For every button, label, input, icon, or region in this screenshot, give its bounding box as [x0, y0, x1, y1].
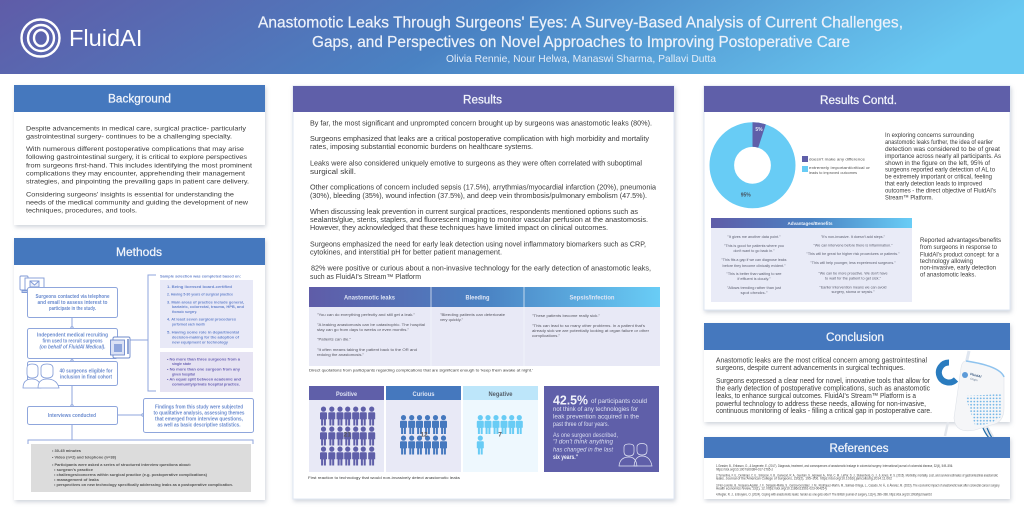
results text: When discussing leak prevention in current surgical practices, respondents mentioned options such as [310, 209, 639, 216]
interview details: • 30-45 minutes [52, 449, 81, 453]
results text: sealants/glue, stents, staplers, and fluorescent imaging to monitor vascular perfusion at the anastomosis. [310, 217, 648, 224]
interview details: • perspectives on new technology specifically addressing leaks as a postoperative complication. [54, 483, 233, 487]
device image: Stream platform [939, 351, 1004, 438]
heading: conclusion [704, 323, 1010, 350]
device image: Stream platform: FluidAI [970, 372, 982, 379]
flow box: recruiting: Independent medical recruiting [37, 332, 108, 338]
title: Gaps, and Perspectives on Novel Approaches to Improving Postoperative Care [312, 34, 850, 51]
heading: methods: Methods [116, 245, 162, 259]
flow box: contact: participate in the study. [49, 306, 96, 312]
reference list [716, 464, 1000, 496]
findings box: Findings from this study were subjected [155, 404, 243, 410]
quotes: sepsis: already sick we are potentially looking at organ failure or other [532, 329, 650, 333]
inclusion criteria list: new equipment or technology [172, 340, 229, 344]
interview details: • challenges/concerns within surgical practice (e.g. postoperative complications) [54, 473, 208, 477]
background text: complications they may encounter, apprehending their management [26, 170, 245, 177]
benefits column 2: surgery, stoma or sepsis." [832, 290, 875, 294]
quotes: anastomotic leaks: stay can go from days to weeks or even months." [317, 328, 410, 332]
reference list: https://doi.org/10.1007/s00384-017-2765-z [716, 467, 773, 471]
cohort limits list: • No more than one surgeon from any [167, 367, 241, 371]
heading: results: Results [463, 94, 502, 106]
advantages text [920, 237, 1001, 279]
callout: 42.5%: 42.5% [553, 392, 588, 408]
table headers [344, 294, 615, 301]
benefits column 1: if effluent is cloudy." [738, 277, 771, 281]
icon: surgeons outline [619, 444, 652, 466]
title: Anastomotic Leaks Through Surgeons' Eyes: A Survey-Based Analysis of Current Challenges, [258, 14, 903, 32]
results text: rates, imposing substantial economic burdens on healthcare systems. [310, 144, 533, 151]
quotes table [309, 287, 660, 366]
benefits column 2: "Earlier intervention means we can avoid [820, 286, 887, 290]
chart legend [802, 156, 871, 175]
inclusion criteria list: bariatric, colorectal, trauma, HPB, and [172, 305, 245, 309]
heading: references [704, 437, 1010, 458]
reference list: 1.Gessler, B., Eriksson, O., & Angenete, E. (2017). Diagnosis, treatment, and consequences of anastomotic leakage in colorectal surgery. International journal of colorectal disease, 32(4), 549–556. [716, 464, 953, 468]
pictogram: negative 7 [463, 386, 538, 472]
findings box: that emerged from interview questions, [155, 416, 243, 422]
conclusion text: the early detection of postoperative complications, such as anastomotic [716, 384, 930, 392]
heading: conclusion: Conclusion [826, 332, 884, 344]
flow box: contact: and email to assess interest to [38, 300, 108, 306]
table headers: Bleeding [466, 294, 490, 301]
donut chart: 95% [741, 192, 751, 198]
conclusion text: powerful technology to address these needs, allowing for non-invasive, [716, 399, 926, 408]
callout: 42.5%: "I don't think anything [553, 439, 614, 446]
cohort limits list: single state [172, 362, 191, 366]
heading: results contd: Results Contd. [820, 95, 897, 107]
results text [310, 120, 656, 281]
results text: Surgeons emphasized that leaks are a critical postoperative complication with high morbidity and mortality [310, 136, 650, 143]
heading: background: Background [108, 94, 171, 106]
pictogram: negative 7: 7 [498, 432, 502, 438]
results contd text: detection was considered to be of great [885, 146, 1000, 153]
quotes: anastomotic leaks: "A leaking anastomosis can be catastrophic. The hospital [317, 323, 425, 327]
conclusion text: surgeons, despite current advancements in surgical techniques. [716, 363, 905, 372]
results text: However, they acknowledged that these techniques have limited impact on clinical outcomes. [310, 225, 608, 232]
flow connectors [28, 275, 253, 444]
reference list: Health economics review, 13(1), 12. https://doi.org/10.1186/s13561-023-00425-y [716, 486, 827, 490]
title [258, 14, 903, 51]
callout: 42.5%: not think of any technologies for [553, 406, 639, 413]
table headers: Sepsis/Infection [570, 294, 615, 301]
benefits column 2: "This will help younger, less experienced surgeons." [810, 261, 896, 265]
authors: Olivia Rennie, Nour Helwa, Manaswi Sharma, Pallavi Dutta [446, 53, 716, 65]
results contd text: that early detection leads to improved [885, 180, 982, 187]
inclusion criteria list: decision-making for the adoption of [172, 335, 240, 339]
results text: Surgeons emphasized the need for early leak detection using novel inflammatory biomarkers such as CRP, [310, 242, 646, 248]
results text: 82% were positive or curious about a non-invasive technology for the early detection of anastomotic leaks, [311, 266, 651, 272]
interview details: • Video (n=2) and telephone (n=38) [52, 456, 117, 460]
device image: Stream platform: Origin [970, 377, 978, 382]
background text: Considering surgeons' insights is essential for understanding the [26, 191, 234, 198]
icon: clipboard [110, 337, 130, 358]
quotes: bleeding: very quickly." [440, 318, 464, 322]
logo: FluidAI: FluidAI [69, 25, 142, 51]
results contd text: shown in the figure on the left, 95% of [885, 160, 990, 167]
benefits column 2: "This will be great for higher risk procedures or patients." [806, 252, 900, 256]
cohort limits list: community/private hospital practice. [172, 383, 240, 387]
advantages text: of anastomotic leaks. [920, 272, 976, 279]
pictogram: curious 12 [386, 386, 461, 472]
advantages text: technology allowing [920, 258, 973, 265]
pictogram: positive 21: 21 [344, 432, 351, 438]
inclusion criteria list: 4. At least seven surgical procedures [167, 318, 236, 322]
quotes: sepsis: "This can lead to so many other problems. In a patient that's [532, 324, 645, 328]
inclusion criteria list: thoracic surgery. [172, 310, 197, 314]
conclusion text [716, 356, 932, 415]
benefits column 2 [806, 235, 900, 294]
inclusion criteria list: 1. Being licensed board-certified [167, 285, 233, 289]
advantages text: Reported advantages/benefits [920, 237, 1001, 244]
quotes: anastomotic leaks: "Patients can die." [317, 338, 352, 342]
pictogram: positive 21: Positive [336, 391, 357, 398]
conclusion text: leaks, to enhance surgical outcomes. FluidAI's Stream™ Platform is a [716, 391, 916, 400]
flow box: recruiting: (on behalf of FluidAI Medical). [40, 344, 106, 350]
benefits column 1: "It gives me another data point." [728, 235, 781, 239]
pictogram: curious 12: Curious [412, 391, 435, 398]
advantages table: Advantages/Benefits [788, 221, 833, 226]
advantages table [711, 218, 912, 302]
benefits column 2: "We can intervene before there is inflammation." [814, 244, 893, 248]
flow box: surgeons eligible: 40 surgeons eligible for [60, 368, 113, 374]
results text: By far, the most significant and unprompted concern brought up by surgeons was anastomotic leaks (80%). [310, 120, 652, 128]
findings box: as well as basic descriptive statistics. [158, 422, 241, 428]
cohort limits list: • An equal split between academic and [167, 378, 242, 382]
icon: laptop and phone [20, 276, 47, 292]
conclusion text: Surgeons expressed a clear need for novel, innovative tools that allow for [716, 376, 931, 385]
results contd text: surgeons reported early detection of AL to [885, 167, 995, 174]
benefits column 1 [722, 235, 787, 295]
findings box [144, 398, 254, 432]
flow box: contact [28, 288, 118, 318]
table headers: Anastomotic leaks [344, 294, 396, 301]
heading: results contd [704, 86, 1010, 112]
benefits column 2: "It's non-invasive. It doesn't add steps." [821, 235, 886, 239]
quotes: sepsis: complications." [532, 334, 561, 338]
results text: Leaks were also considered uniquely emotive to surgeons as they were often correlated with suboptimal [310, 160, 642, 168]
icon: two surgeons [23, 364, 59, 388]
interview details [31, 444, 251, 492]
quotes: anastomotic leaks: redoing the anastomosis." [317, 353, 365, 357]
donut chart: 5% [755, 127, 763, 133]
callout: 42.5%: As one surgeon described, [553, 432, 618, 439]
flow box: recruiting: firm used to recruit surgeons [42, 338, 102, 344]
cohort limits list: given hospital [172, 373, 195, 377]
benefits column 2: "We can be more proactive. We don't have [818, 272, 888, 276]
conclusion text: continuous monitoring of leaks - filling a critical gap in postoperative care. [716, 406, 932, 415]
callout: 42.5%: has changed in the last [553, 447, 613, 454]
panel: results [293, 86, 674, 499]
interview details: • management of leaks [54, 478, 99, 482]
sample selection heading: Sample selection was completed based on: [160, 274, 241, 278]
flow box: interviews [28, 406, 118, 424]
results contd text: be extremely important or critical, feeling [885, 173, 992, 180]
background text: from surgeons first-hand. This includes identifying the most prominent [26, 162, 252, 169]
inclusion criteria list: 3. Main areas of practice include general, [167, 300, 244, 304]
interview details: • surgeon's practice [54, 468, 93, 472]
heading: results [293, 86, 674, 112]
benefits column 2: to wait for the patient to get sick." [825, 276, 882, 280]
chart legend: extremely important/critical or [809, 165, 871, 170]
callout: 42.5%: past three of four years. [553, 421, 609, 428]
quotes: sepsis [532, 314, 650, 338]
benefits column 1: "This is better than waiting to see [726, 272, 782, 276]
quotes: anastomotic leaks [317, 313, 425, 357]
results text: cytokines, and interstitial pH for better patient management. [310, 250, 502, 256]
callout: 42.5%: six years." [553, 454, 578, 461]
donut chart [722, 122, 783, 198]
results contd text: importance across nearly all participants. As [885, 153, 1001, 160]
results text: surgical skill. [310, 169, 356, 176]
inclusion criteria list [160, 280, 253, 348]
reference list: 4.Regler, R. J., & Bruyère, O. (2024). Coping with anastomotic leaks: harder as one gets older? The British journal of surgery, 111(4), 396–398. https://doi.org/10.1093/bjs/znae010 [716, 492, 932, 496]
heading: references: References [830, 443, 889, 455]
logo: FluidAI [22, 20, 142, 56]
background text [26, 125, 252, 214]
results text: (30%), bleeding (35%), wound infection (37.5%), and deep vein thrombosis/pulmonary embolism (47.5%). [310, 193, 647, 200]
inclusion criteria list: 5. Having some role in departmental [167, 330, 239, 334]
inclusion criteria list: 2. Having 5-30 years of surgical practice [167, 293, 233, 297]
quotes: sepsis: "These patients become really sick." [532, 314, 601, 318]
panel: results contd [704, 86, 1010, 310]
benefits column 1: before they become clinically evident." [722, 264, 786, 268]
pictogram: positive 21 [309, 386, 384, 472]
results contd text [885, 132, 1001, 201]
background text: following gastrointestinal surgery, it is critical to explore perspectives [26, 154, 248, 161]
heading: background [14, 85, 265, 112]
chart legend: doesn't make any difference [809, 156, 866, 162]
benefits column 1: "Allows trending rather than just [727, 286, 781, 290]
background text: strategies, and pinpointing the prevailing gaps in patient care delivery. [26, 179, 249, 186]
quotes: bleeding [440, 313, 505, 322]
flow box: recruiting [28, 328, 118, 358]
background text: needs of the medical community and guiding the development of new [26, 199, 248, 206]
results text: such as FluidAI's Stream™ Platform [310, 274, 421, 281]
results contd text: Stream™ Platform. [885, 194, 933, 201]
background text: gastrointestinal surgery- continues to be a challenging specialty. [26, 133, 232, 140]
header banner [0, 0, 1024, 74]
benefits column 1: don't want to go back in." [734, 249, 775, 253]
panel: conclusion [704, 323, 1010, 422]
heading: methods [14, 238, 265, 265]
inclusion criteria list: performed each month [172, 323, 206, 327]
benefits column 1: "This fits a gap if we can diagnose leaks [722, 258, 787, 262]
flow box: contact: Surgeons contacted via telephone [36, 294, 110, 300]
benefits column 1: "This is good for patients where you [724, 244, 784, 248]
background text: Despite advancements in medical care, surgical practice- particularly [26, 125, 247, 132]
quotes: anastomotic leaks: "You can do everything perfectly and still get a leak." [317, 313, 416, 317]
results contd text: anastomotic leaks further, the idea of earlier [885, 139, 994, 146]
results contd text: outcomes - the direct objective of FluidAI's [885, 187, 996, 194]
cohort limits list: • No more than three surgeons from a [167, 357, 241, 361]
panel: references [704, 437, 1010, 499]
interview details: • Participants were asked a series of structured interview questions about: [52, 463, 191, 467]
pictogram caption: First reaction to technology that would non-invasively detect anastomotic leaks [308, 476, 460, 480]
results text: Other complications of concern included sepsis (17.5%), arrythmias/myocardial infarction (20%), pneumonia [310, 184, 656, 192]
quotes: bleeding: "Bleeding patients can deteriorate [440, 313, 505, 317]
results contd text: In exploring concerns surrounding [885, 132, 974, 139]
benefits column 1: spot checks." [740, 291, 769, 295]
chart legend: leads to improved outcomes [809, 170, 857, 175]
pictogram: negative 7: Negative [488, 391, 513, 398]
table caption: Direct quotations from participants regarding complications that are significant enough to 'keep them awake at night.' [309, 368, 533, 372]
conclusion text: Anastomotic leaks are the most critical concern among gastrointestinal [716, 356, 927, 364]
flow box: surgeons eligible [28, 362, 118, 386]
quotes: anastomotic leaks: "It often means taking the patient back to the OR and [317, 348, 417, 352]
advantages text: FluidAI's product concept: for a [920, 251, 999, 258]
background text: With numerous different postoperative complications that may arise [26, 146, 244, 153]
findings box: to qualitative analysis, assessing themes [154, 410, 244, 416]
panel: methods [14, 238, 265, 500]
callout: 42.5%: of participants could [591, 398, 647, 405]
cohort limits list [160, 352, 253, 392]
advantages text: from surgeons in response to [920, 244, 997, 251]
pictogram: curious 12: 12 [420, 432, 428, 438]
reference list: leaks. Journal of the American College of Surgeons, 220(2), 195–206. https://doi.org/10.1016/j.jamcollsurg.2014.11.002 [716, 477, 892, 481]
advantages text: non-invasive, early detection [920, 265, 996, 272]
panel: background [14, 85, 265, 225]
background text: techniques, procedures, and tools. [26, 207, 137, 214]
flow box: interviews: Interviews conducted [48, 413, 96, 419]
flow box: surgeons eligible: inclusion in final cohort [60, 374, 112, 380]
callout: 42.5% [544, 386, 659, 472]
callout: 42.5%: leak prevention acquired in the [553, 414, 639, 421]
